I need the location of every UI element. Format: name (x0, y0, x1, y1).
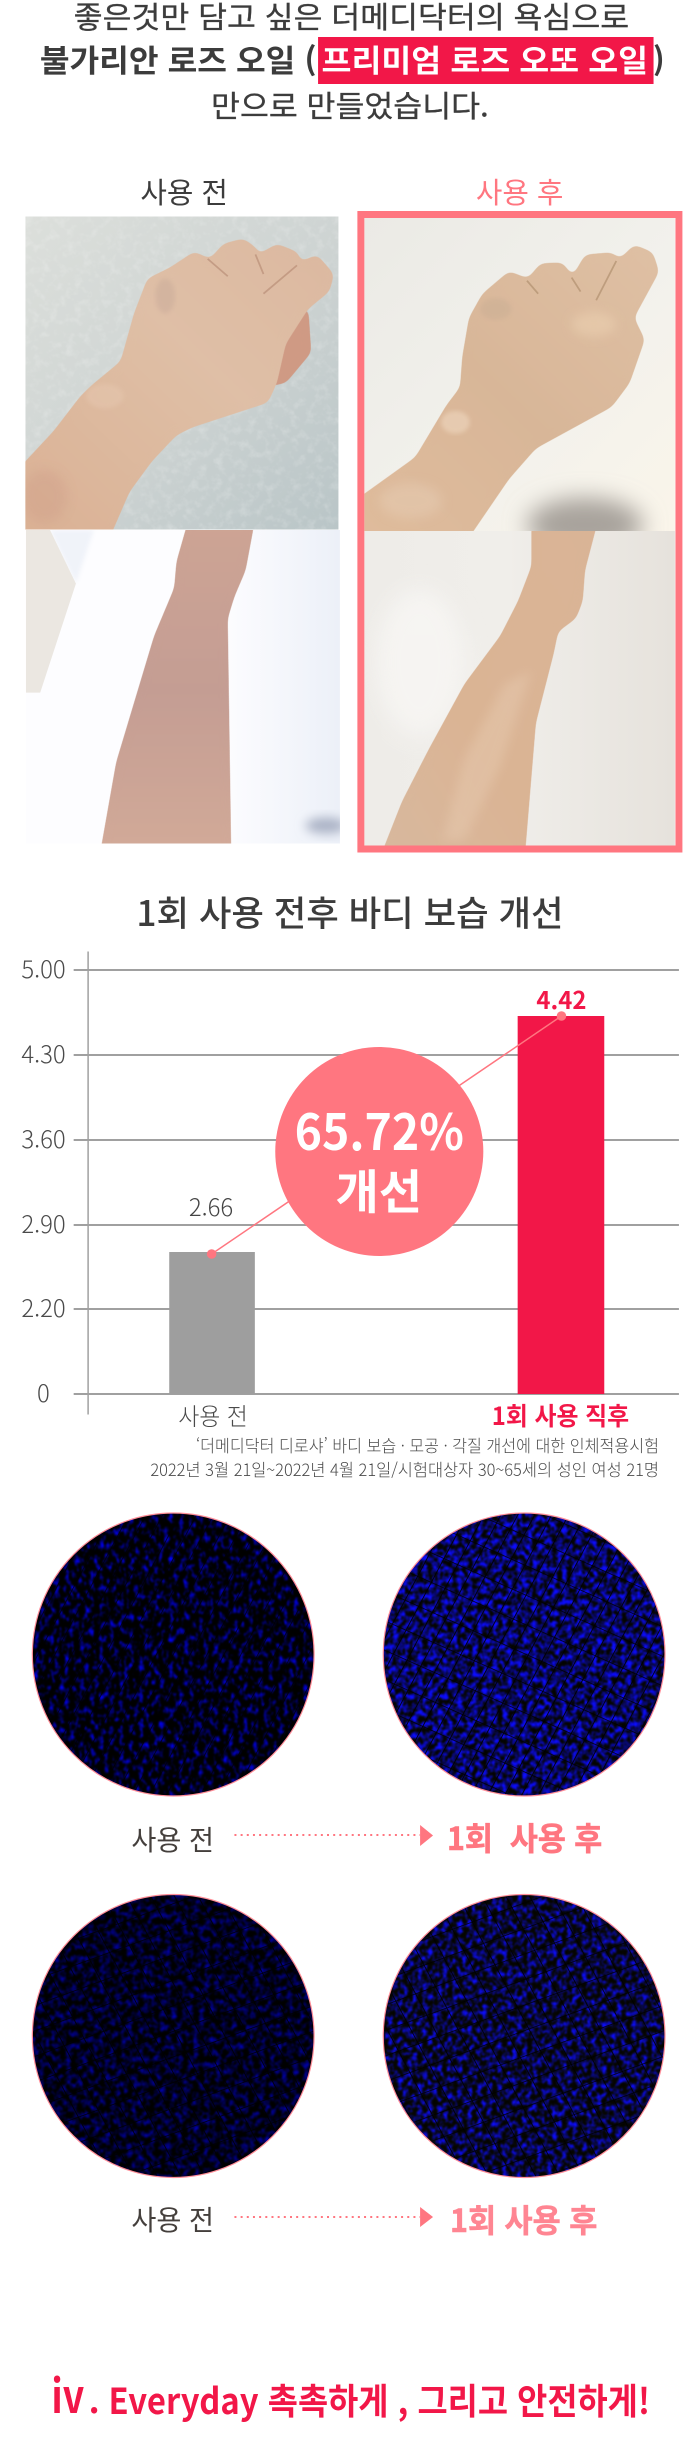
highlight box (318, 37, 654, 84)
caption row, set 2 (131, 2196, 597, 2242)
heading text: Everyday 촉촉하게 , 그리고 안전하게! (109, 2373, 650, 2425)
skin scan: after, set 2 (382, 1894, 666, 2178)
y-axis labels (21, 950, 66, 1409)
bar: after (518, 1016, 604, 1394)
skin scan: before, set 2 (32, 1894, 315, 2178)
section heading: everyday (51, 2361, 650, 2427)
value: after: 4.42 (536, 981, 586, 1016)
heading line 3: 만으로 만들었습니다. (211, 82, 489, 126)
photo: forearm before (26, 523, 347, 858)
caption: before: 사용 전 (131, 2199, 214, 2239)
callout: improvement (275, 1047, 483, 1256)
frame: after-use photos (361, 214, 679, 849)
photo: hand after (364, 218, 675, 531)
footnote: test details: ‘더메디닥터 디로샤’ 바디 보습 · 모공 · 각질 개선에 대한 인체적용시험 (196, 1432, 659, 1457)
callout: improvement: 개선 (335, 1155, 422, 1223)
x label: before: 사용 전 (178, 1397, 248, 1432)
value: before: 2.66 (189, 1188, 233, 1223)
trend line (207, 1011, 566, 1259)
arrow (234, 1825, 433, 1846)
heading line 2: 불가리안 로즈 오일 ( (40, 36, 317, 81)
y-axis labels: 4.30 (21, 1035, 66, 1070)
caption: after: 1회 사용 후 (447, 1814, 602, 1860)
caption: after: 1회 사용 후 (450, 2196, 597, 2242)
photo: forearm after (364, 523, 675, 858)
arrow (234, 2207, 433, 2227)
caption: before: 사용 전 (131, 1819, 214, 1859)
photo: hand before (25, 216, 338, 530)
closing parenthesis: ) (653, 36, 665, 81)
numeral: iv (51, 2361, 84, 2427)
y-axis labels: 2.20 (21, 1289, 66, 1324)
bar: before (169, 1252, 255, 1394)
y-axis labels: 5.00 (21, 950, 66, 985)
footnote: test details: 2022년 3월 21일~2022년 4월 21일/시험대상자 30~65세의 성인 여성 21명 (150, 1456, 659, 1481)
y-axis labels: 3.60 (21, 1120, 66, 1155)
skin scan: after, set 1 (382, 1513, 666, 1797)
heading: intro copy (40, 0, 665, 126)
footnote: test details (150, 1432, 659, 1481)
highlighted product name: 프리미엄 로즈 오또 오일 (322, 36, 648, 81)
chart title: 1회 사용 전후 바디 보습 개선 (136, 886, 563, 937)
x label: after: 1회 사용 직후 (492, 1397, 629, 1433)
y-axis labels: 2.90 (21, 1205, 66, 1240)
bar chart: moisture before and after (21, 950, 679, 1433)
period: . (89, 2374, 100, 2423)
label: after use: 사용 후 (476, 170, 563, 212)
callout: improvement: 65.72% (295, 1093, 464, 1165)
skin scan: before, set 1 (32, 1513, 315, 1797)
label: before use: 사용 전 (140, 170, 228, 212)
y-axis labels: 0 (37, 1374, 50, 1409)
caption row, set 1 (131, 1814, 602, 1860)
